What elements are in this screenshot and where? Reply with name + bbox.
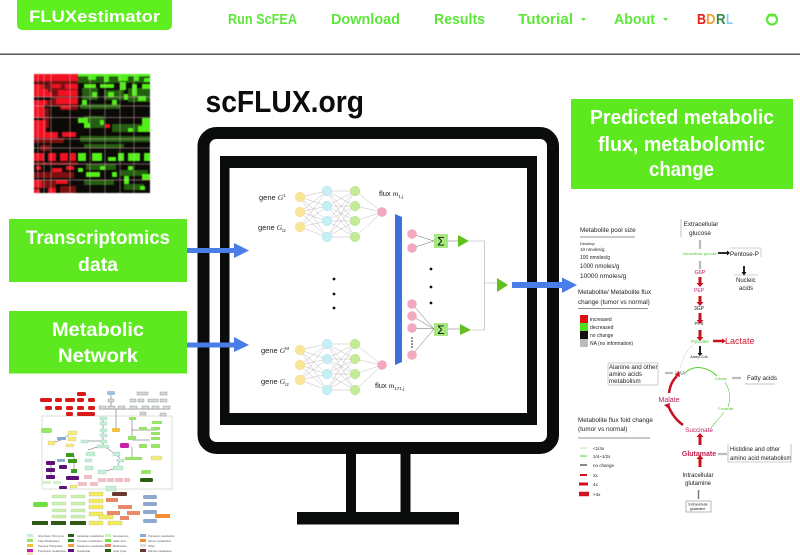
title: scFLUX.org bbox=[206, 84, 364, 119]
map legend: Methionine bbox=[113, 544, 127, 548]
map legend: Transport metabolism bbox=[148, 534, 176, 538]
logo button bbox=[17, 0, 172, 30]
map panel frame bbox=[42, 416, 172, 489]
map legend: Nucleotide bbox=[77, 549, 91, 553]
red reaction group bbox=[40, 392, 95, 416]
metabolic pathway map bbox=[578, 219, 791, 512]
pathway nodes: Extracellular bbox=[684, 221, 718, 228]
pathway nodes: OAA bbox=[675, 371, 686, 377]
gene and flux labels: 171,j bbox=[394, 386, 404, 391]
monitor screen border bbox=[220, 156, 537, 425]
flux fold change legend: 2x bbox=[593, 473, 599, 478]
panel: predicted metabolic flux: change bbox=[649, 159, 714, 181]
map legend: Other bbox=[148, 544, 155, 548]
flux fold change legend: <1/4x bbox=[593, 446, 605, 451]
panel: metabolic network: Metabolic bbox=[52, 319, 144, 341]
nav links bbox=[228, 11, 668, 28]
nav links: Run ScFEA bbox=[228, 11, 297, 28]
flux fold change legend: >4x bbox=[593, 492, 601, 497]
gene and flux labels: i2 bbox=[282, 228, 286, 233]
map legend bbox=[27, 534, 176, 555]
metabolite flux colour legend: NA (no information) bbox=[590, 341, 633, 347]
gray reaction group bbox=[99, 392, 170, 416]
metabolite pool size legend: 100 nmoles/g bbox=[580, 255, 610, 261]
metabolite flux colour legend: Metabolite/ Metabolite flux bbox=[578, 289, 652, 296]
BDRL link: L bbox=[726, 11, 733, 28]
metabolite flux colour legend bbox=[578, 289, 652, 347]
lower pathway nodes bbox=[32, 492, 170, 525]
panel: metabolic network: Network bbox=[58, 345, 138, 367]
pathway nodes: Citrate bbox=[715, 376, 728, 381]
flux fold change legend bbox=[578, 417, 653, 497]
side boxes: amino acids bbox=[609, 371, 642, 378]
side boxes: amino acid metabolism bbox=[730, 456, 791, 462]
flux fold change legend: 1/4~1/2x bbox=[593, 454, 611, 459]
flux fold change legend: no change bbox=[593, 463, 615, 468]
pathway nodes: Fumarate bbox=[719, 407, 734, 411]
gene and flux labels: gene G bbox=[261, 377, 285, 386]
pathway nodes: Intracellular bbox=[682, 473, 714, 479]
pathway nodes: Glutamate bbox=[682, 451, 716, 458]
gene and flux labels: flux m bbox=[375, 381, 394, 390]
map legend: Pentose Phosphate bbox=[38, 544, 63, 548]
nav links: Download bbox=[331, 11, 400, 28]
BDRL link: R bbox=[716, 11, 726, 28]
lower subnetwork bbox=[295, 339, 387, 395]
pathway arrows bbox=[665, 240, 744, 499]
map connections bbox=[51, 393, 170, 476]
output triangles bbox=[458, 235, 508, 335]
panel: predicted metabolic flux: flux, metabolomic bbox=[598, 134, 765, 156]
pathway nodes: PEP bbox=[694, 288, 705, 294]
gene and flux labels: flux m bbox=[379, 189, 398, 198]
metabolite pool size legend: Desktop bbox=[580, 241, 595, 246]
map legend: Fatty Metabolism bbox=[38, 539, 60, 543]
nav links: About bbox=[614, 11, 655, 28]
sum box lower: Σ bbox=[437, 323, 445, 337]
map legend: Glutamine metabolism bbox=[77, 544, 105, 548]
BDRL link bbox=[697, 11, 733, 28]
central pathway nodes bbox=[41, 417, 162, 491]
side boxes: metabolism bbox=[609, 378, 641, 385]
sum box upper: Σ bbox=[437, 234, 445, 248]
map legend: Aspartate metabolism bbox=[77, 534, 105, 538]
gene and flux labels: gene G bbox=[258, 223, 282, 232]
logo button: FLUXestimator bbox=[29, 7, 160, 26]
map legend: Glycolysis TCA cycle bbox=[38, 534, 64, 538]
nav links: Results bbox=[434, 11, 485, 28]
gene and flux labels: 1 bbox=[283, 193, 286, 198]
map legend: Polyamine metabolism bbox=[38, 549, 67, 553]
aggregation connections bbox=[412, 234, 460, 355]
side boxes: Nucleic bbox=[736, 278, 756, 284]
icon: github bbox=[767, 14, 777, 24]
nav links: Tutorial bbox=[518, 11, 573, 28]
pathway nodes: Acetyl-CoA bbox=[690, 355, 708, 359]
pathway nodes: Malate bbox=[658, 397, 680, 404]
map legend: Urea cycle bbox=[113, 549, 127, 553]
pathway nodes: Succinate bbox=[685, 427, 713, 434]
pathway nodes: PPS bbox=[694, 321, 704, 326]
arrow: metabolic network to monitor bbox=[187, 337, 249, 352]
map legend: Sialic acid bbox=[113, 539, 126, 543]
output connections bbox=[469, 241, 497, 330]
pathway nodes: glutamine bbox=[685, 481, 712, 487]
lactate label: Lactate bbox=[725, 336, 755, 346]
arrow: transcriptomics to monitor bbox=[187, 243, 249, 258]
monitor bbox=[204, 133, 553, 524]
panel: transcriptomics data bbox=[9, 219, 187, 282]
pathway nodes: Pyruvate bbox=[691, 339, 709, 344]
side boxes: Fatty acids bbox=[747, 375, 777, 382]
metabolite flux colour legend: decreased bbox=[590, 325, 614, 331]
side boxes: glutamine bbox=[690, 507, 705, 511]
gene and flux labels bbox=[258, 189, 404, 391]
pathway nodes: Intracellular glucose bbox=[683, 252, 717, 256]
sum box upper bbox=[434, 234, 448, 248]
metabolite pool size legend bbox=[580, 227, 636, 280]
panel: predicted metabolic flux: Predicted metabolic bbox=[590, 107, 774, 129]
map legend: Hexosamine bbox=[113, 534, 129, 538]
panel: transcriptomics data: Transcriptomics bbox=[26, 227, 170, 249]
side boxes: Pentose-P bbox=[730, 251, 759, 258]
gene and flux labels: M bbox=[285, 346, 289, 351]
gene and flux labels: 1,j bbox=[398, 194, 403, 199]
navigation bar bbox=[0, 0, 800, 55]
side boxes: Extracellular bbox=[688, 502, 709, 506]
sum box lower bbox=[434, 323, 448, 337]
side boxes: acids bbox=[739, 286, 753, 292]
pathway nodes: G6P bbox=[694, 270, 706, 276]
monitor frame bbox=[204, 133, 553, 448]
metabolite pool size legend: Metabolite pool size bbox=[580, 227, 636, 234]
map legend: Steroid metabolism bbox=[148, 549, 173, 553]
BDRL link: D bbox=[706, 11, 716, 28]
neural network diagram bbox=[258, 186, 508, 395]
gene and flux labels: i2 bbox=[285, 382, 289, 387]
metabolite pool size legend: 10 nmoles/g bbox=[580, 247, 605, 252]
metabolite flux colour legend: increased bbox=[590, 317, 612, 323]
map legend: Serine metabolism bbox=[148, 539, 172, 543]
side boxes bbox=[608, 219, 791, 512]
heatmap bbox=[34, 74, 150, 193]
side boxes: Histidine and other bbox=[730, 447, 780, 453]
monitor stand bbox=[297, 454, 459, 524]
gene and flux labels: gene G bbox=[261, 346, 285, 355]
arrow: monitor to prediction bbox=[512, 278, 577, 293]
metabolite pool size legend: 1000 nmoles/g bbox=[580, 264, 619, 270]
panel: transcriptomics data: data bbox=[78, 254, 118, 276]
pathway nodes: 3GP bbox=[694, 306, 705, 312]
metabolic network map bbox=[27, 391, 176, 555]
pathway nodes: glucose bbox=[689, 230, 711, 237]
metabolite flux colour legend: change (tumor vs normal) bbox=[578, 299, 650, 306]
dots between subnetworks bbox=[333, 268, 432, 348]
metabolite flux colour legend: no change bbox=[590, 333, 614, 339]
panel: predicted metabolic flux bbox=[571, 99, 793, 189]
side boxes: Alanine and other bbox=[609, 364, 658, 371]
BDRL link: B bbox=[697, 11, 706, 28]
flux fold change legend: 4x bbox=[593, 482, 599, 487]
pathway nodes bbox=[658, 221, 734, 487]
flux fold change legend: Metabolite flux fold change bbox=[578, 417, 653, 424]
upper subnetwork bbox=[295, 186, 387, 242]
flux fold change legend: (tumor vs normal) bbox=[578, 426, 627, 433]
map legend: Tyrosine metabolism bbox=[77, 539, 103, 543]
blue concatenation bar bbox=[395, 214, 402, 365]
panel: metabolic network bbox=[9, 311, 187, 374]
metabolite pool size legend: 10000 nmoles/g bbox=[580, 273, 627, 280]
gene and flux labels: gene G bbox=[259, 193, 283, 202]
